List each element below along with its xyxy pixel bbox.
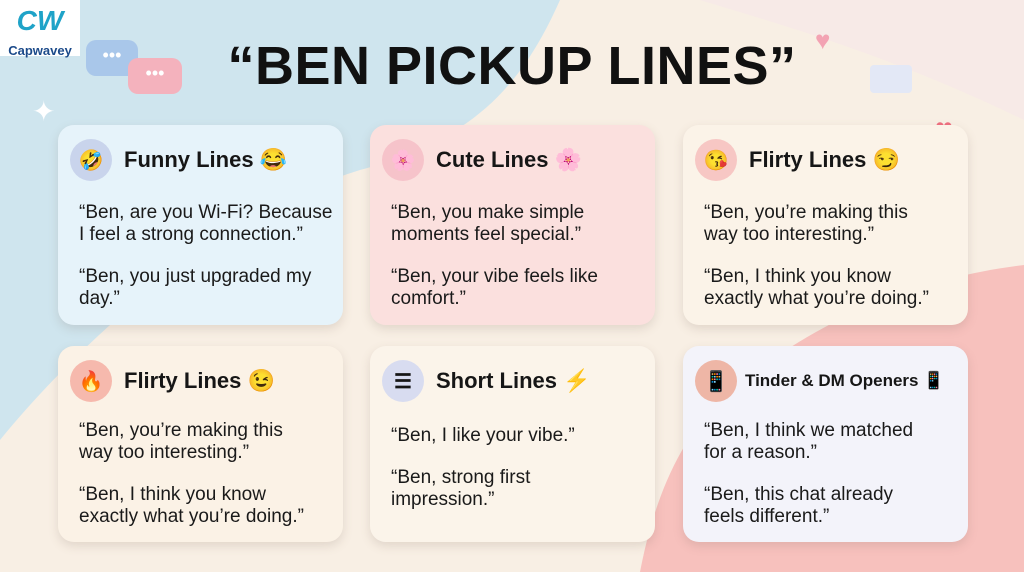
icon: chat bubbles: •••	[103, 45, 121, 65]
icon: hearts and envelope: ♥	[815, 25, 830, 55]
text: funny lines: “Ben, you just upgraded my	[79, 266, 311, 287]
heading: cute: 🌸	[391, 150, 415, 172]
icon: chat bubbles: •••	[146, 63, 164, 83]
heading: cute: Cute Lines 🌸	[436, 147, 582, 172]
text: cute lines: comfort.”	[391, 288, 466, 309]
panel: cute lines	[370, 125, 655, 325]
heading: funny: 🤣	[79, 150, 103, 172]
panel: short lines	[370, 346, 655, 542]
text: flirty lines 1: way too interesting.”	[704, 224, 874, 245]
heading: cute	[382, 139, 582, 181]
icon: hearts and envelope	[815, 25, 953, 146]
heading: tinder	[695, 360, 944, 402]
heading: tinder: 📱	[704, 370, 728, 392]
heading: short: ☰	[394, 370, 412, 392]
text: cute lines: “Ben, your vibe feels like	[391, 266, 598, 287]
text: tinder lines: “Ben, this chat already	[704, 484, 893, 505]
text: short lines: impression.”	[391, 489, 494, 510]
text: tinder lines: feels different.”	[704, 506, 829, 527]
heading: flirty 2: 🔥	[79, 370, 103, 392]
text: short lines: “Ben, I like your vibe.”	[391, 425, 575, 446]
text: flirty lines 1: exactly what you’re doing.”	[704, 288, 929, 309]
text: flirty lines 1: “Ben, you’re making this	[704, 202, 908, 223]
icon: chat bubbles	[86, 40, 182, 94]
logo: Capwavey	[8, 43, 72, 58]
text: cute lines	[391, 202, 598, 309]
text: flirty lines 2: way too interesting.”	[79, 442, 249, 463]
text: short lines: “Ben, strong first	[391, 467, 530, 488]
text: flirty lines 2: “Ben, I think you know	[79, 484, 266, 505]
heading: funny	[70, 139, 287, 181]
panel: flirty lines 2	[58, 346, 343, 542]
text: funny lines: day.”	[79, 288, 120, 309]
heading: flirty 2: Flirty Lines 😉	[124, 368, 275, 393]
heading: short: Short Lines ⚡	[436, 368, 591, 393]
heading: tinder: Tinder & DM Openers 📱	[745, 371, 944, 390]
icon: hearts and envelope: ♥	[935, 113, 953, 146]
text: funny lines: I feel a strong connection.”	[79, 224, 303, 245]
panel: flirty lines 1	[683, 125, 968, 325]
text: tinder lines: for a reason.”	[704, 442, 817, 463]
heading: funny: Funny Lines 😂	[124, 147, 287, 172]
text: flirty lines 1	[704, 202, 929, 309]
heading: flirty 1: 😘	[704, 150, 728, 172]
panel: funny lines	[58, 125, 343, 325]
text: flirty lines 1: “Ben, I think you know	[704, 266, 891, 287]
panel: tinder & dm openers	[683, 346, 968, 542]
text: cute lines: moments feel special.”	[391, 224, 581, 245]
text: flirty lines 2: “Ben, you’re making this	[79, 420, 283, 441]
logo	[0, 0, 80, 56]
logo: CW	[17, 5, 66, 36]
heading: flirty 1: Flirty Lines 😏	[749, 147, 900, 172]
heading: flirty 1	[695, 139, 900, 181]
text: funny lines	[79, 202, 332, 309]
text: flirty lines 2: exactly what you’re doing.”	[79, 506, 304, 527]
text: tinder lines: “Ben, I think we matched	[704, 420, 913, 441]
heading: short	[382, 360, 591, 402]
text: short lines	[391, 425, 575, 510]
text: flirty lines 2	[79, 420, 304, 527]
text: tinder lines	[704, 420, 913, 527]
icon: sparkles: ✦	[32, 96, 55, 127]
title: “BEN PICKUP LINES”	[227, 36, 797, 96]
text: funny lines: “Ben, are you Wi-Fi? Because	[79, 202, 332, 223]
heading: flirty 2	[70, 360, 275, 402]
text: cute lines: “Ben, you make simple	[391, 202, 584, 223]
